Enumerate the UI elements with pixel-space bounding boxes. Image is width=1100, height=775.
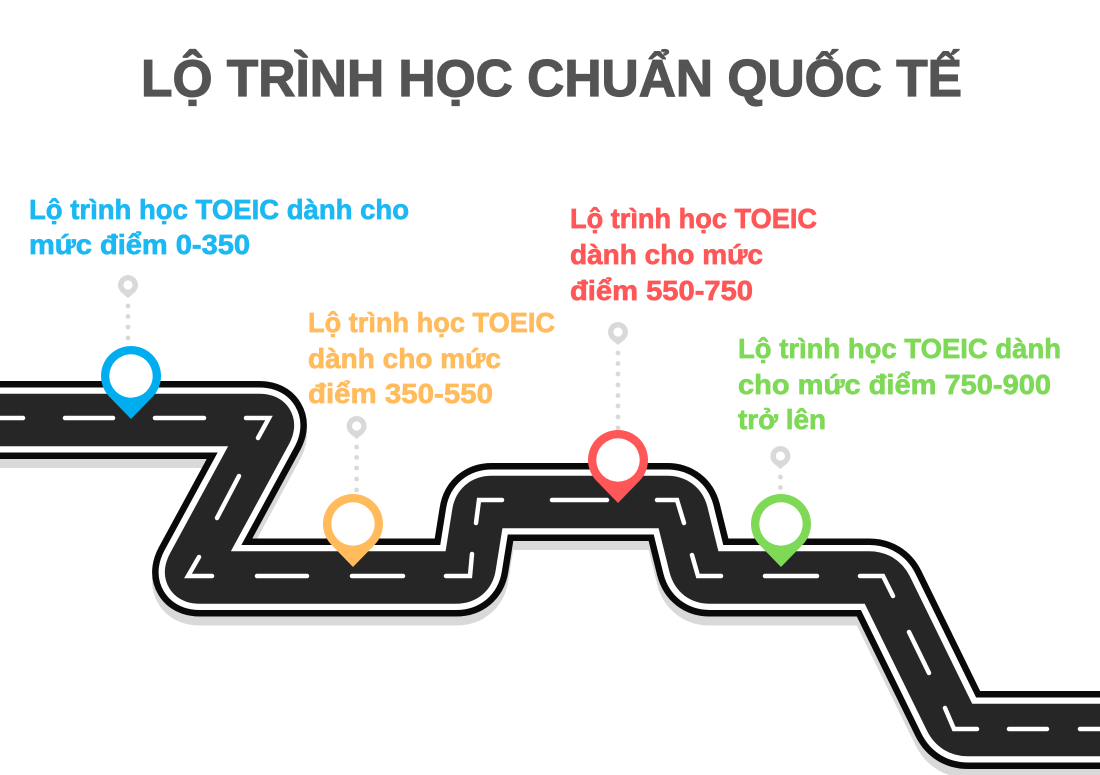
milestone 2: orange label: Lộ trình học TOEIC — [308, 307, 555, 338]
milestone 4: green label: cho mức điểm 750-900 — [738, 369, 1051, 400]
milestone 1: small grey marker and dots — [118, 275, 138, 340]
milestone 3: small grey marker and dots — [608, 322, 628, 430]
milestone 2: orange label: dành cho mức — [308, 343, 501, 374]
milestone 1: blue label — [29, 194, 409, 260]
milestone 3: red label: dành cho mức — [570, 239, 763, 270]
milestone 3: red label — [570, 203, 817, 306]
milestone 2: orange label — [308, 307, 555, 409]
road — [0, 418, 1100, 739]
milestone 1: blue label: mức điểm 0-350 — [29, 229, 250, 260]
milestone 4: green label: Lộ trình học TOEIC dành — [738, 333, 1061, 364]
milestone 2: small grey marker and dots — [347, 416, 367, 492]
milestone 3: red label: điểm 550-750 — [570, 275, 753, 306]
milestone 3: red pin — [588, 430, 648, 503]
milestone 2: orange pin — [323, 494, 383, 567]
milestone 1: blue label: Lộ trình học TOEIC dành cho — [29, 194, 409, 225]
milestone 4: green label: trở lên — [738, 404, 826, 435]
milestone 4: small grey marker and dots — [770, 446, 790, 490]
title: LỘ TRÌNH HỌC CHUẨN QUỐC TẾ — [141, 49, 962, 108]
milestone 1: blue pin — [101, 346, 161, 419]
milestone 4: green pin — [751, 494, 811, 567]
milestone 2: orange label: điểm 350-550 — [308, 378, 493, 409]
road centre dashes — [0, 418, 1100, 729]
milestone 3: red label: Lộ trình học TOEIC — [570, 203, 817, 234]
milestone 4: green label — [738, 333, 1061, 435]
